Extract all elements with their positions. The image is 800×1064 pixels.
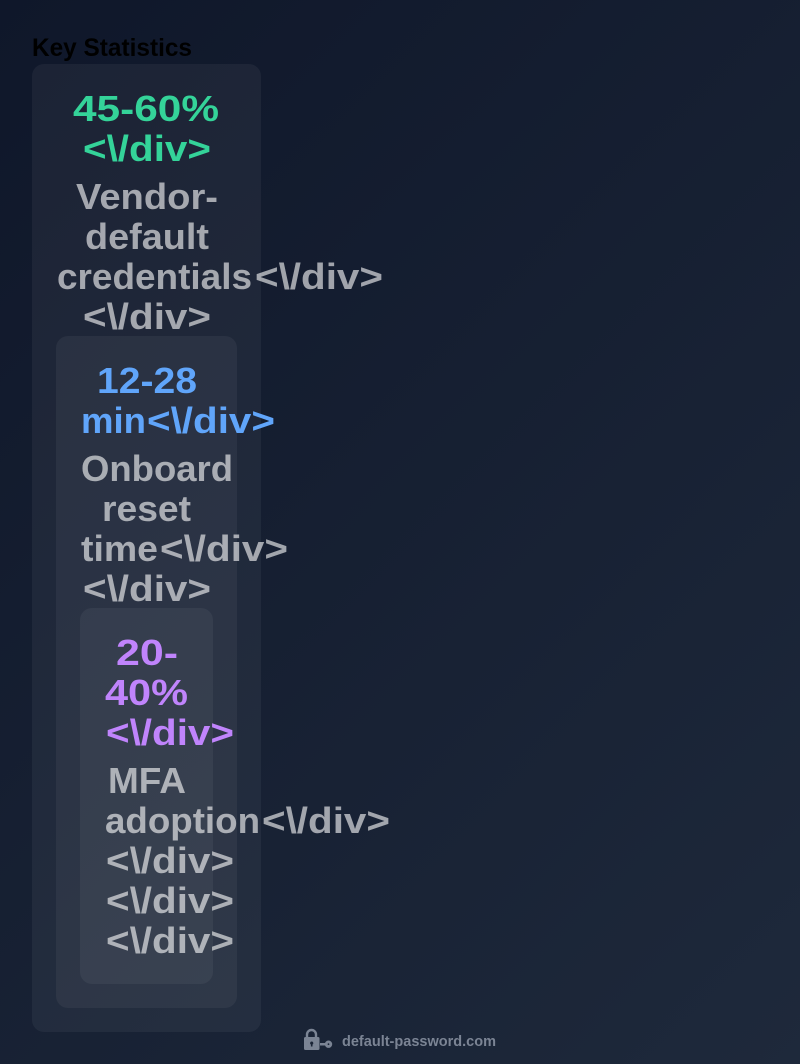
stat value: 45-60% — [73, 88, 219, 169]
stat label: onboard reset time: time — [81, 528, 158, 569]
stat value: 20-40%: <\/div> — [106, 712, 234, 753]
panel: statistics inner card — [80, 608, 390, 984]
stat value: 12-28 min: min — [81, 400, 146, 441]
stat label: onboard reset time: <\/div> — [83, 568, 211, 609]
stat label: vendor-default credentials: credentials — [57, 256, 252, 297]
stat label: MFA adoption: adoption — [105, 800, 260, 841]
stat label: onboard reset time — [81, 448, 288, 609]
footer: brand — [304, 1030, 496, 1050]
stat value: 12-28 min: <\/div> — [147, 400, 275, 441]
stat label: vendor-default credentials: default — [85, 216, 209, 257]
icon: padlock with key — [304, 1030, 332, 1050]
stat label: MFA adoption: <\/div> — [106, 880, 234, 921]
panel: statistics outer card — [32, 64, 390, 1032]
stat label: MFA adoption: <\/div> — [106, 920, 234, 961]
stat label: onboard reset time: Onboard — [81, 448, 233, 489]
stat label: MFA adoption: <\/div> — [106, 840, 234, 881]
stat label: onboard reset time: <\/div> — [160, 528, 288, 569]
stat label: onboard reset time: reset — [102, 488, 191, 529]
stat value: 20-40%: 40% — [105, 672, 188, 713]
stat value: 45-60%: <\/div> — [83, 128, 211, 169]
title: Key Statistics — [32, 34, 192, 62]
stat value: 20-40% — [105, 632, 234, 753]
stat label: MFA adoption — [105, 760, 390, 961]
stat label: vendor-default credentials: <\/div> — [255, 256, 383, 297]
stat value: 12-28 min — [81, 360, 275, 441]
stat label: vendor-default credentials: Vendor- — [76, 176, 218, 217]
stat value: 12-28 min: 12-28 — [97, 360, 197, 401]
stat label: MFA adoption: <\/div> — [262, 800, 390, 841]
stat value: 45-60%: 45-60% — [73, 88, 219, 129]
stat value: 20-40%: 20- — [116, 632, 178, 673]
footer text: default-password.com — [342, 1034, 496, 1050]
panel: statistics middle card — [56, 336, 390, 1008]
stat label: MFA adoption: MFA — [108, 760, 186, 801]
stat label: vendor-default credentials: <\/div> — [83, 296, 211, 337]
stat label: vendor-default credentials — [57, 176, 383, 337]
